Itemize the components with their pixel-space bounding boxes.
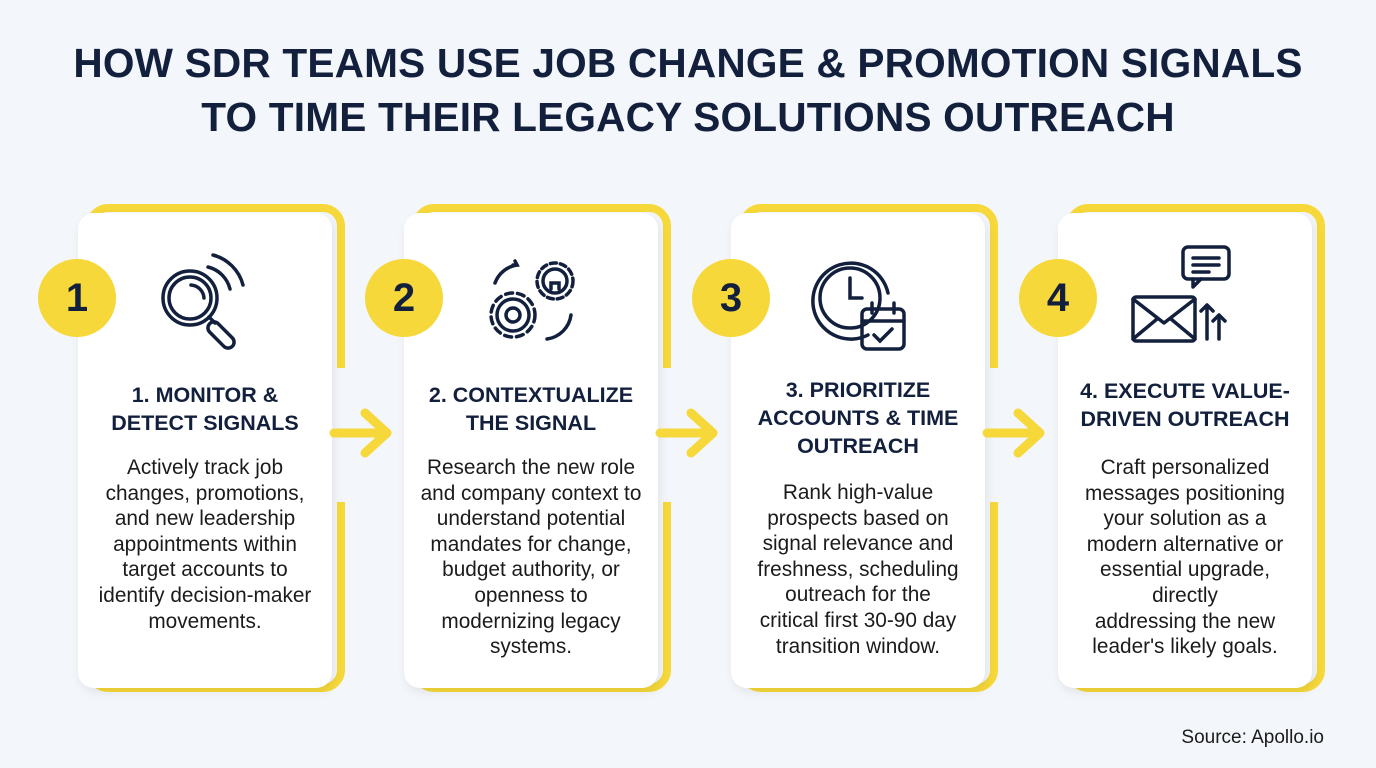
heading	[1080, 379, 1290, 431]
heading: DRIVEN OUTREACH	[1080, 407, 1290, 431]
badge 3: 3	[720, 276, 742, 320]
text: changes, promotions,	[106, 482, 304, 505]
heading: THE SIGNAL	[466, 411, 596, 435]
text: Craft personalized	[1101, 456, 1269, 479]
text: systems.	[490, 635, 572, 658]
text: movements.	[148, 610, 262, 633]
text: essential upgrade,	[1100, 558, 1270, 581]
text: modern alternative or	[1087, 533, 1283, 556]
text: critical first 30-90 day	[760, 609, 956, 632]
text: understand potential	[437, 507, 625, 530]
text: transition window.	[776, 635, 940, 658]
badge 2	[365, 259, 443, 337]
badge 4	[1019, 259, 1097, 337]
icon: gears	[489, 259, 575, 341]
arrow 3	[987, 413, 1040, 453]
panel: step 4	[1058, 213, 1312, 688]
text: identify decision-maker	[99, 584, 311, 607]
heading	[429, 383, 633, 435]
panel: step 2	[404, 213, 658, 688]
heading: DETECT SIGNALS	[111, 411, 299, 435]
text	[757, 481, 959, 658]
panel: step 3	[731, 213, 985, 688]
text: Actively track job	[127, 456, 283, 479]
icon: magnifier with signal	[161, 253, 245, 350]
text: messages positioning	[1085, 482, 1285, 505]
text	[421, 456, 641, 658]
heading: 4. EXECUTE VALUE-	[1080, 379, 1290, 403]
text: signal relevance and	[763, 532, 953, 555]
title: HOW SDR TEAMS USE JOB CHANGE & PROMOTION SIGNALS	[73, 40, 1303, 86]
heading	[758, 378, 958, 458]
badge 3	[692, 259, 770, 337]
source: Source: Apollo.io	[1181, 727, 1324, 748]
text: modernizing legacy	[441, 610, 621, 633]
heading	[111, 383, 299, 435]
text: freshness, scheduling	[757, 558, 959, 581]
badge 4: 4	[1047, 276, 1069, 320]
heading: ACCOUNTS & TIME	[758, 406, 958, 430]
heading: 1. MONITOR &	[132, 383, 278, 407]
title	[73, 40, 1303, 140]
icon: envelope and chat	[1131, 245, 1231, 343]
text: directly	[1152, 584, 1218, 607]
text: addressing the new	[1095, 610, 1275, 633]
text	[1085, 456, 1285, 658]
text: and new leadership	[115, 507, 295, 530]
text: your solution as a	[1103, 507, 1266, 530]
arrow 1	[334, 413, 387, 453]
arrow 2	[660, 413, 713, 453]
panel: step 1	[78, 213, 332, 688]
text: leader's likely goals.	[1092, 635, 1278, 658]
badge 1	[38, 259, 116, 337]
text: prospects based on	[767, 507, 949, 530]
badge 2: 2	[393, 276, 415, 320]
badge 1: 1	[66, 276, 88, 320]
heading: 2. CONTEXTUALIZE	[429, 383, 633, 407]
text: appointments within	[113, 533, 297, 556]
text: openness to	[474, 584, 588, 607]
text: mandates for change,	[430, 533, 632, 556]
heading: 3. PRIORITIZE	[786, 378, 930, 402]
heading: OUTREACH	[797, 434, 919, 458]
text	[99, 456, 311, 633]
text: budget authority, or	[442, 558, 620, 581]
title: TO TIME THEIR LEGACY SOLUTIONS OUTREACH	[201, 94, 1175, 140]
icon: clock and calendar	[811, 261, 906, 351]
text: outreach for the	[785, 583, 931, 606]
text: target accounts to	[122, 558, 288, 581]
text: Rank high-value	[783, 481, 933, 504]
text: Research the new role	[427, 456, 635, 479]
text: and company context to	[421, 482, 641, 505]
